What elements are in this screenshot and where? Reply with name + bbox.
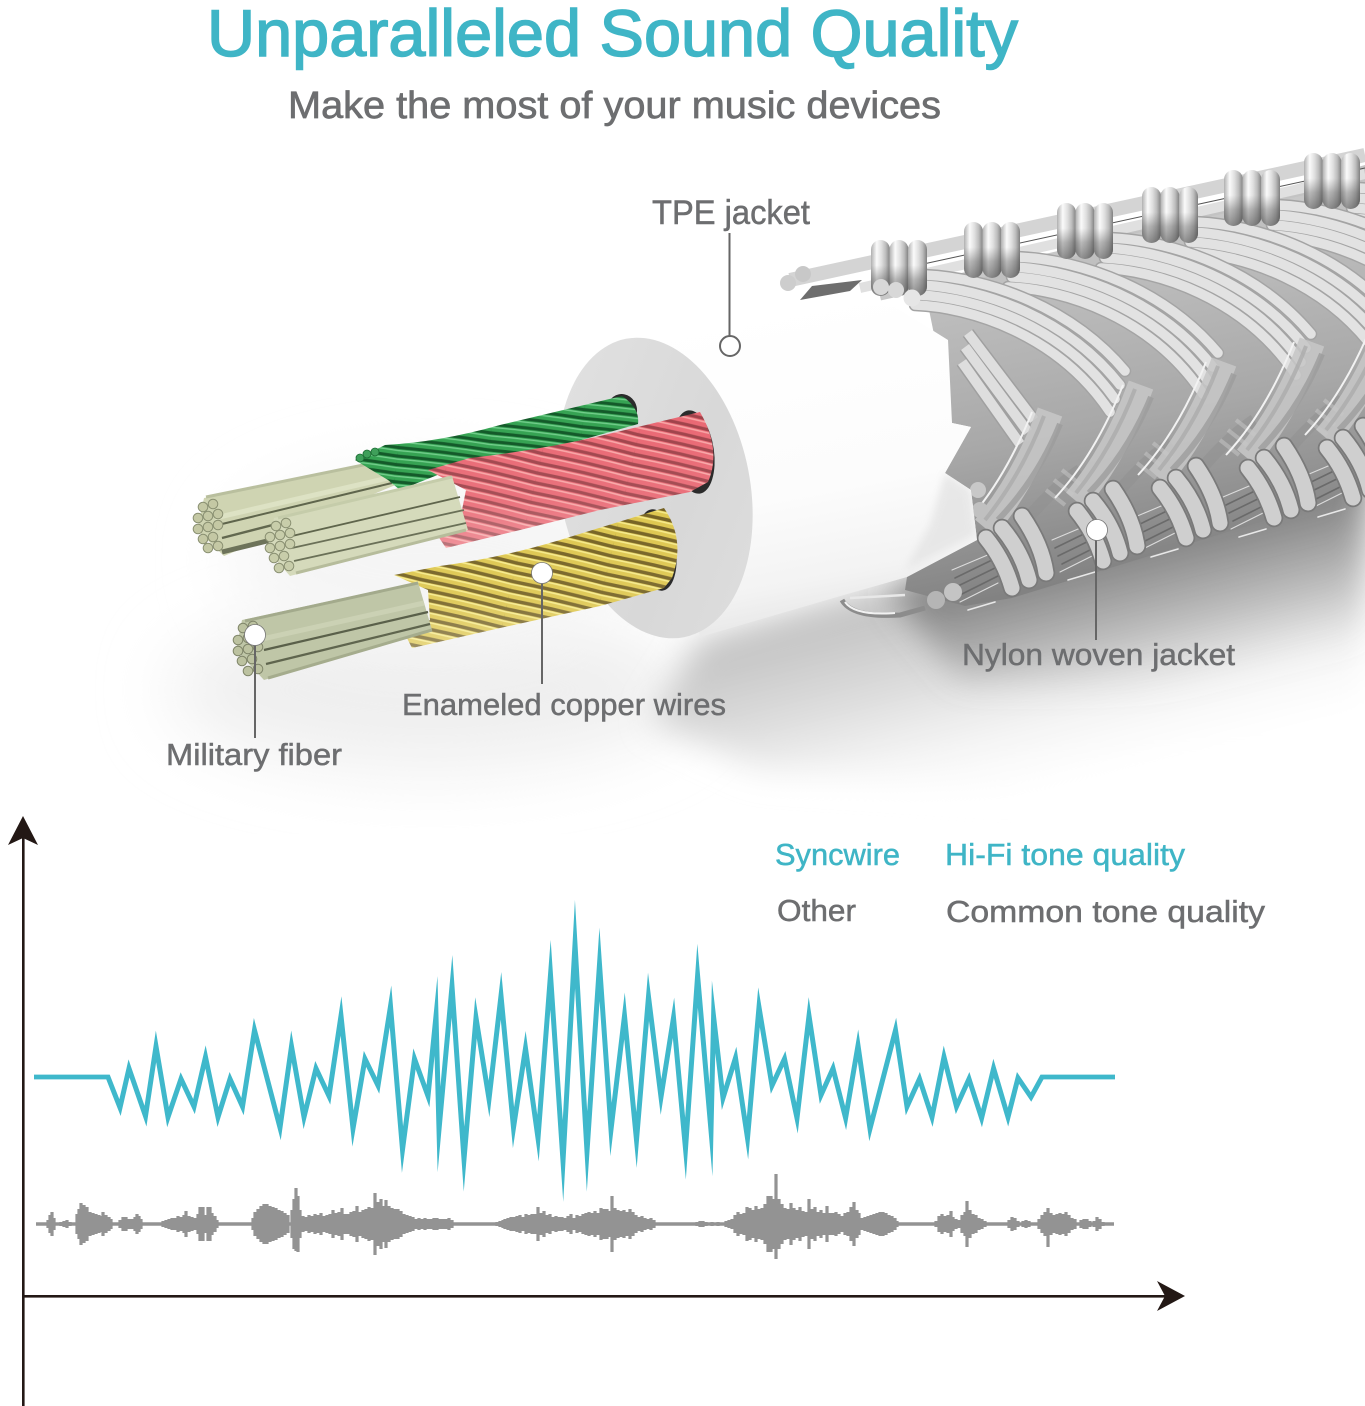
waveform: other common gray signal bbox=[36, 1174, 1114, 1259]
TPE disc cross-section bbox=[533, 321, 777, 655]
callout: TPE jacket: TPE jacket bbox=[652, 194, 811, 232]
fiber core: yellow front bbox=[233, 582, 432, 680]
left inner strand bundle bbox=[962, 333, 1034, 444]
panel: TPE jacket body bbox=[533, 300, 977, 655]
subtitle: Make the most of your music devices bbox=[288, 85, 941, 127]
green conductor bbox=[355, 396, 638, 490]
panel: conductor exit holes bbox=[604, 391, 720, 593]
red conductor bbox=[428, 412, 713, 548]
callout: Nylon woven jacket bbox=[962, 520, 1235, 672]
fine twisted texture along lower edge bbox=[952, 461, 1348, 610]
back fiber end cap bbox=[193, 499, 223, 553]
panel: nylon woven jacket bbox=[780, 153, 1365, 615]
yellow fiber end cap bbox=[233, 621, 263, 676]
legend: Other: Other bbox=[777, 893, 856, 928]
legend: Other bbox=[777, 893, 1266, 929]
callout: TPE jacket bbox=[652, 194, 811, 356]
fiber core: back bbox=[193, 461, 398, 556]
chart: y axis bbox=[8, 816, 38, 1406]
callout: Military fiber bbox=[166, 624, 342, 772]
white cut faces at first trio bbox=[873, 279, 920, 306]
yellow conductor bbox=[394, 508, 677, 648]
shadow under cable bbox=[170, 460, 1365, 785]
legend: Syncwire bbox=[775, 837, 1186, 872]
legend: Syncwire: Hi-Fi tone quality bbox=[945, 837, 1186, 872]
waveform: Syncwire Hi-Fi teal line bbox=[34, 944, 1115, 1161]
rising translucent bands bbox=[975, 338, 1365, 536]
cut rod ends at left tip bbox=[780, 266, 862, 300]
callout: Enameled copper wires: Enameled copper wires bbox=[402, 687, 726, 722]
fiber core: red front bbox=[265, 476, 468, 576]
lower tube trios bbox=[986, 426, 1365, 588]
legend: Other: Common tone quality bbox=[946, 894, 1266, 929]
callout: Military fiber: Military fiber bbox=[166, 737, 342, 772]
chrome top trios bbox=[871, 153, 1360, 296]
silver lower loop and cut ends bbox=[842, 482, 988, 615]
longitudinal rods along top edge bbox=[790, 155, 1365, 296]
chart: x axis bbox=[23, 1281, 1185, 1311]
legend: Syncwire: Syncwire bbox=[775, 837, 900, 872]
callout: Enameled copper wires bbox=[402, 562, 726, 722]
red fiber end cap bbox=[265, 518, 295, 573]
callout: Nylon woven jacket: Nylon woven jacket bbox=[962, 637, 1235, 672]
sweeping white arcs bbox=[915, 171, 1365, 412]
